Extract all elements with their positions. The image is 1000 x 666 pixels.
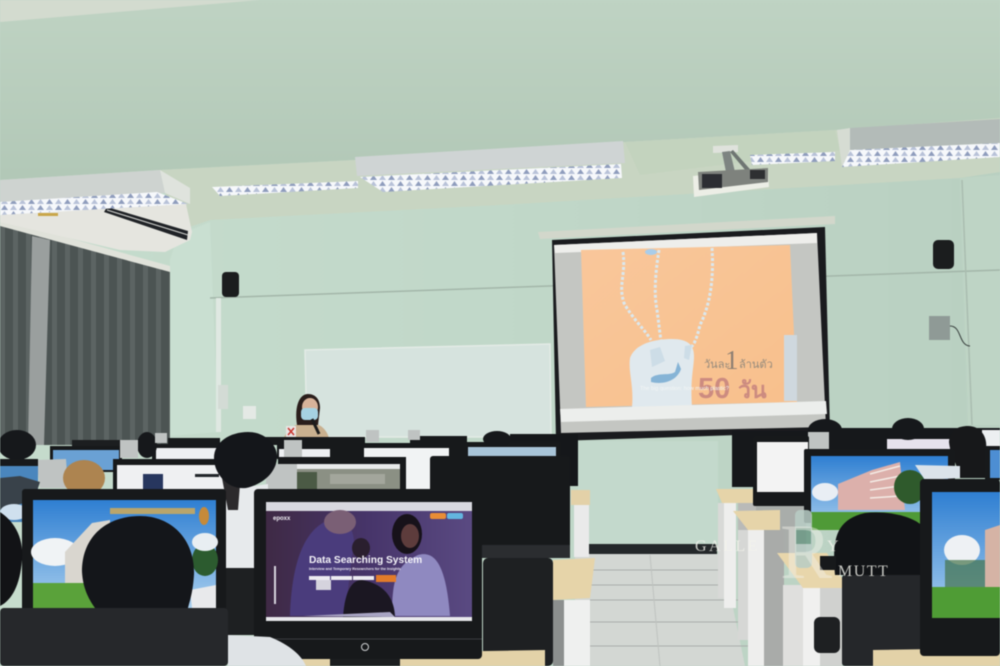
orange slide [581, 245, 797, 407]
monitor: second row white page [113, 459, 226, 490]
wall pipe and switches [216, 298, 256, 432]
watermark: MUTT [838, 563, 889, 580]
monitor: far left mountain wallpaper [0, 459, 40, 522]
slide text [640, 345, 773, 405]
air conditioner [0, 204, 192, 252]
front left monitor with wallpaper [22, 489, 226, 614]
slide text: 1 [725, 345, 738, 375]
monitor stand centre [330, 655, 400, 666]
website headline: Data Searching System [309, 555, 422, 566]
monitor back centre [430, 456, 570, 558]
chair backs [224, 558, 932, 666]
student with blonde hair [63, 460, 105, 496]
monitor: university wallpaper right [804, 449, 960, 530]
website search form [274, 566, 396, 604]
presenter wearing mask [282, 394, 330, 443]
whiteboard [305, 344, 551, 437]
tiled floor [575, 554, 750, 666]
ceiling light 5 [837, 119, 1000, 167]
back row monitors [50, 428, 1000, 491]
slide text: The big question: how much plastic? [640, 386, 729, 392]
paper tag on map monitor [266, 464, 297, 490]
paper tags on monitors [36, 430, 829, 488]
watermark [695, 508, 889, 595]
front monitor back lower left [0, 608, 228, 666]
slide text: 50 [698, 373, 730, 405]
slide text: วันละ [704, 359, 730, 371]
white shirt lower left [228, 635, 306, 666]
student seen from behind at centre [214, 432, 277, 570]
right side desks [716, 489, 843, 666]
seated student with long hair [949, 426, 987, 478]
ceiling light 1 [0, 170, 190, 215]
monitor logo [362, 644, 368, 650]
ceiling light 2 [212, 181, 358, 196]
window curtain [0, 219, 170, 445]
projection screen [538, 216, 835, 441]
projector [693, 145, 769, 197]
speaker right [933, 240, 954, 269]
ceiling light 3 [355, 141, 625, 192]
slide pipes [622, 248, 712, 347]
wall box and cable [929, 316, 970, 346]
people in website photo [290, 510, 450, 617]
website buttons [430, 513, 446, 519]
front row desks [300, 648, 1000, 666]
ceiling light 4 [750, 152, 835, 165]
monitor: white screen right [753, 436, 809, 506]
back row students [0, 418, 924, 460]
watermark: GALLE [695, 538, 760, 555]
slide text: ล้านตัว [739, 359, 773, 371]
monitor: Data Searching System website [254, 489, 482, 659]
website subtitle: Interview and Temporary Researchers for the Insights [309, 567, 401, 571]
monitor: far right edge [985, 446, 1000, 480]
monitor: second row map page [278, 457, 406, 489]
player controls [560, 401, 827, 422]
lower wall and baseboard [575, 441, 718, 554]
student head in front of monitor [82, 516, 194, 608]
watermark: Y [827, 538, 839, 555]
watermark: R [780, 508, 832, 595]
website logo: epoxx [273, 516, 291, 522]
slide text: วัน [738, 377, 767, 403]
slide tank with whale [630, 249, 694, 407]
water bottle [795, 510, 812, 568]
speaker left [222, 272, 239, 297]
dark side student at left edge [0, 512, 22, 606]
front right monitor with wallpaper [920, 479, 1000, 656]
jacket draped over student [834, 512, 926, 575]
centre desks [553, 490, 595, 666]
keyboard [820, 556, 836, 570]
